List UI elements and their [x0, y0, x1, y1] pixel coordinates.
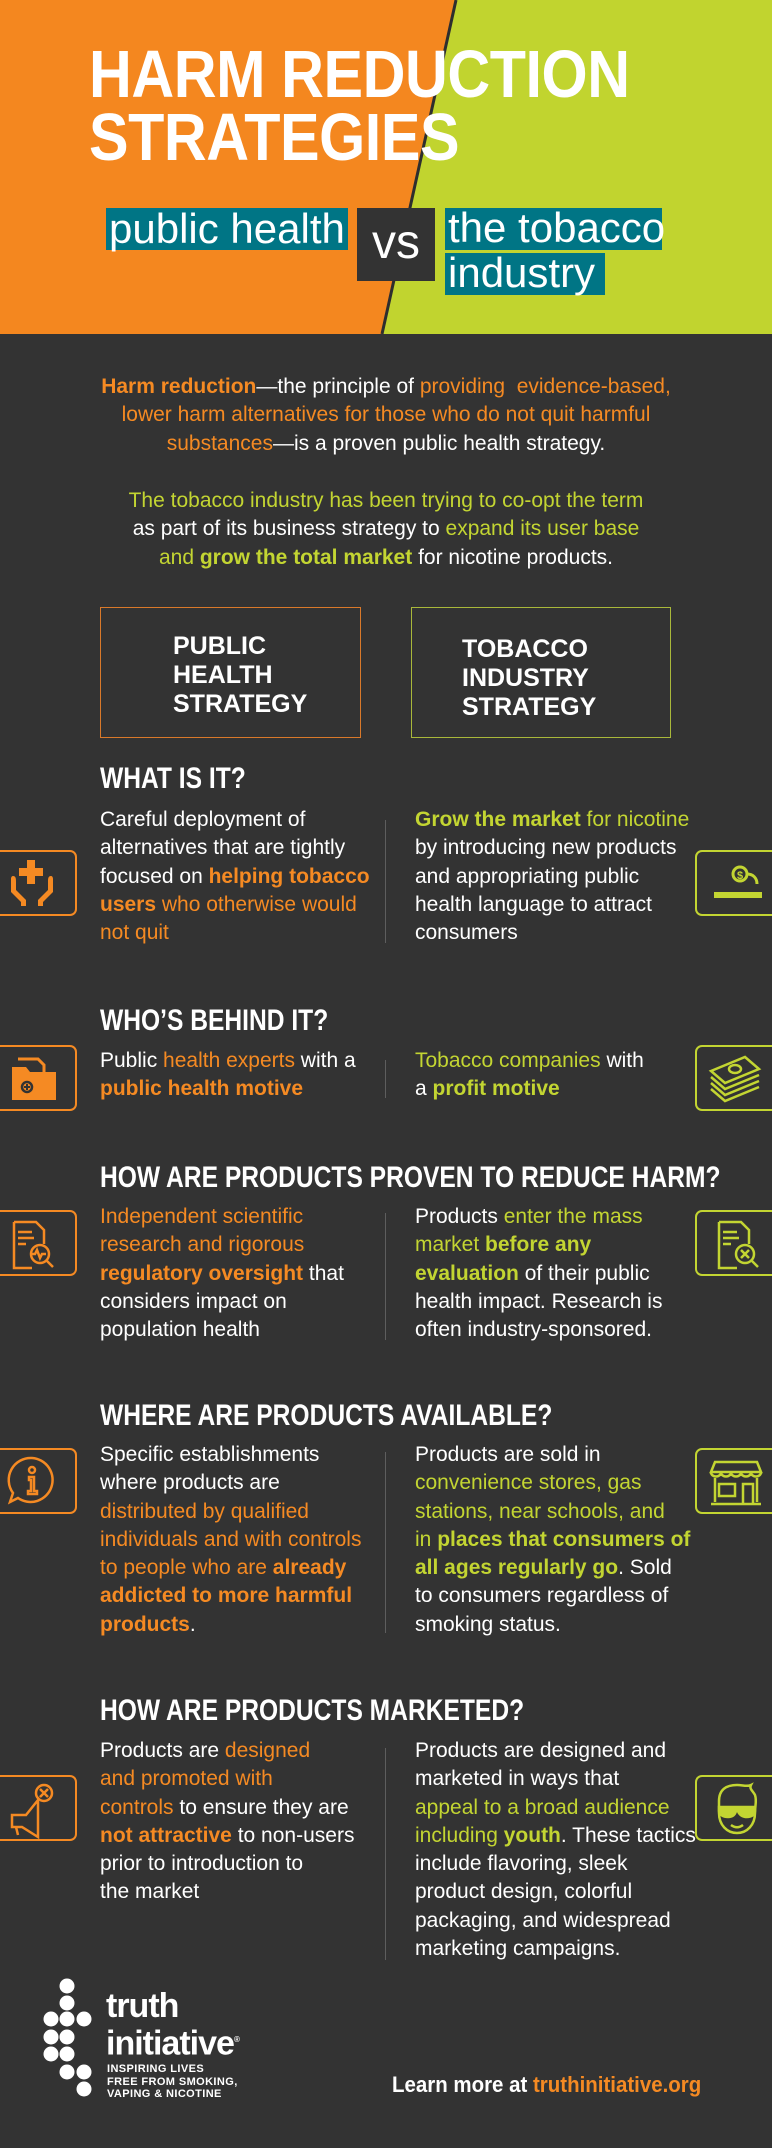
text: proven left: research and rigorous	[100, 1233, 304, 1256]
text: marketed left	[100, 1739, 354, 1903]
logo tagline: INSPIRING LIVES	[107, 2063, 204, 2075]
text: marketed left: Products are designed	[100, 1739, 310, 1762]
text: available right: Products are sold in	[415, 1443, 601, 1466]
intro paragraph 1: substances—is a proven public health strategy.	[167, 432, 605, 455]
heading: what is it: WHAT IS IT?	[100, 762, 246, 795]
logo tagline	[107, 2063, 238, 2100]
icon: cigarette with money	[695, 850, 772, 916]
icon: hands with cross	[0, 850, 77, 916]
learn more: Learn more at truthinitiative.org	[392, 2072, 701, 2097]
text: proven left: population health	[100, 1318, 260, 1341]
icon: logo dots	[44, 1978, 92, 2096]
text: marketed right: Products are designed and	[415, 1739, 666, 1762]
text: who right	[415, 1049, 644, 1100]
text: marketed right: appeal to a broad audience	[415, 1796, 670, 1819]
text: available right: all ages regularly go. Sold	[415, 1556, 672, 1579]
box: public health strategy: HEALTH	[173, 661, 273, 689]
logo wordmark: truth	[106, 1987, 178, 2025]
text: marketed right	[415, 1739, 696, 1960]
text: what right: Grow the market for nicotine	[415, 808, 689, 831]
text: what left: not quit	[100, 921, 169, 944]
intro paragraph 1	[101, 375, 671, 455]
icon: money stack	[695, 1045, 772, 1111]
text: available left: to people who are already	[100, 1556, 346, 1579]
text: marketed left: prior to introduction to	[100, 1852, 303, 1875]
icon: document with pulse magnifier	[0, 1210, 77, 1276]
text: proven left	[100, 1205, 344, 1341]
icon: face with sunglasses	[695, 1775, 772, 1841]
logo wordmark: initiative®	[106, 2024, 239, 2062]
box: tobacco industry strategy: TOBACCO	[462, 635, 588, 663]
text: marketed right: marketing campaigns.	[415, 1937, 620, 1960]
icon: info bubble	[0, 1448, 77, 1514]
logo tagline: FREE FROM SMOKING,	[107, 2076, 238, 2088]
text: available right: stations, near schools, and	[415, 1500, 665, 1523]
text: who left: Public health experts with a	[100, 1049, 356, 1072]
title	[89, 37, 630, 175]
box: tobacco industry strategy	[411, 607, 671, 738]
text: available right: convenience stores, gas	[415, 1471, 641, 1494]
text: available right	[415, 1443, 690, 1636]
text: marketed left: and promoted with	[100, 1767, 273, 1790]
text: proven right: evaluation of their public	[415, 1262, 650, 1285]
text: marketed left: not attractive to non-users	[100, 1824, 354, 1847]
subtitle: the tobacco industry: the tobacco	[448, 204, 665, 251]
logo wordmark	[106, 1987, 240, 2062]
intro paragraph 1: Harm reduction—the principle of providing evidence-based,	[101, 375, 671, 398]
text: what left: alternatives that are tightly	[100, 836, 345, 859]
logo tagline: VAPING & NICOTINE	[107, 2088, 222, 2100]
intro paragraph 2: The tobacco industry has been trying to co-opt the term	[129, 489, 643, 512]
intro paragraph 2: and grow the total market for nicotine products.	[159, 546, 613, 569]
text: proven left: regulatory oversight that	[100, 1262, 344, 1285]
box: tobacco industry strategy: INDUSTRY	[462, 664, 589, 692]
text: proven right: Products enter the mass	[415, 1205, 643, 1228]
footer logo	[44, 1978, 240, 2100]
subtitle: the tobacco industry: industry	[448, 249, 595, 296]
box: public health strategy: STRATEGY	[173, 690, 307, 718]
header background	[0, 0, 772, 334]
text: what right: health language to attract	[415, 893, 652, 916]
text: available left: products.	[100, 1613, 196, 1636]
text: proven right: health impact. Research is	[415, 1290, 662, 1313]
text: available right: in places that consumers of	[415, 1528, 690, 1551]
text: what left: Careful deployment of	[100, 808, 305, 831]
heading: marketed: HOW ARE PRODUCTS MARKETED?	[100, 1694, 524, 1727]
text: marketed left: controls to ensure they are	[100, 1796, 349, 1819]
subtitle: public health: public health	[109, 205, 345, 252]
text: available left	[100, 1443, 361, 1636]
text: available left: where products are	[100, 1471, 280, 1494]
text: marketed right: marketed in ways that	[415, 1767, 619, 1790]
text: what left: focused on helping tobacco	[100, 865, 370, 888]
text: available left: individuals and with controls	[100, 1528, 361, 1551]
text: available right: to consumers regardless of	[415, 1584, 668, 1607]
icon: cigarette with money: $	[737, 870, 743, 882]
subtitle: the tobacco industry	[445, 204, 665, 296]
subtitle: vs: vs	[372, 216, 420, 269]
text: what right: by introducing new products	[415, 836, 676, 859]
text: who left: public health motive	[100, 1077, 303, 1100]
text: marketed right: product design, colorful	[415, 1880, 632, 1903]
icon: store	[695, 1448, 772, 1514]
text: who right: a profit motive	[415, 1077, 560, 1100]
text: who left	[100, 1049, 356, 1100]
text: available left: distributed by qualified	[100, 1500, 309, 1523]
text: marketed left: the market	[100, 1880, 199, 1903]
subtitle: vs	[357, 208, 435, 281]
text: marketed right: including youth. These tactics	[415, 1824, 696, 1847]
box: tobacco industry strategy: STRATEGY	[462, 693, 596, 721]
text: marketed right: include flavoring, sleek	[415, 1852, 627, 1875]
heading: proven: HOW ARE PRODUCTS PROVEN TO REDUCE HARM?	[100, 1161, 720, 1194]
box: public health strategy	[100, 607, 361, 738]
text: what right: and appropriating public	[415, 865, 639, 888]
text: proven right	[415, 1205, 662, 1341]
text: what right: consumers	[415, 921, 518, 944]
text: who right: Tobacco companies with	[415, 1049, 644, 1072]
text: proven left: considers impact on	[100, 1290, 287, 1313]
icon: document with x magnifier	[695, 1210, 772, 1276]
title: HARM REDUCTION	[89, 37, 630, 112]
text: available left: Specific establishments	[100, 1443, 319, 1466]
text: available right: smoking status.	[415, 1613, 561, 1636]
icon: folder	[0, 1045, 77, 1111]
text: what left: users who otherwise would	[100, 893, 357, 916]
title: STRATEGIES	[89, 100, 459, 175]
text: proven right: market before any	[415, 1233, 591, 1256]
text: what left	[100, 808, 370, 944]
text: available left: addicted to more harmful	[100, 1584, 352, 1607]
heading: available: WHERE ARE PRODUCTS AVAILABLE?	[100, 1399, 552, 1432]
intro paragraph 2	[129, 489, 643, 569]
heading: who's behind it: WHO’S BEHIND IT?	[100, 1004, 328, 1037]
box: public health strategy: PUBLIC	[173, 632, 266, 660]
text: marketed right: packaging, and widespread	[415, 1909, 671, 1932]
icon: megaphone with x	[0, 1775, 77, 1841]
intro paragraph 1: lower harm alternatives for those who do not quit harmful	[122, 403, 650, 426]
text: what right	[415, 808, 689, 944]
intro paragraph 2: as part of its business strategy to expand its user base	[133, 517, 639, 540]
text: proven right: often industry-sponsored.	[415, 1318, 652, 1341]
text: proven left: Independent scientific	[100, 1205, 303, 1228]
